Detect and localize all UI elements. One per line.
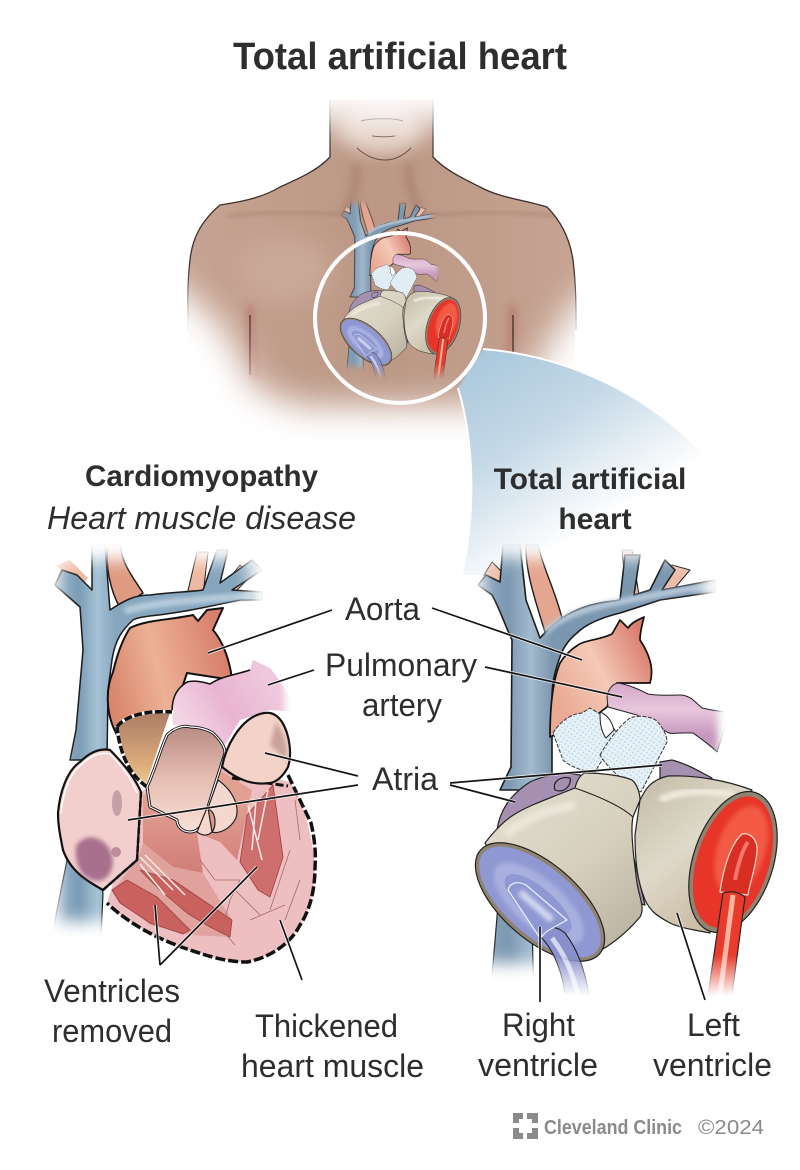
chest shading	[226, 102, 560, 380]
upper ventricle cavity	[143, 770, 252, 873]
vessels	[50, 545, 262, 960]
illustration: small artificial heart in circle	[315, 199, 485, 403]
illustration: torso	[187, 100, 577, 430]
dashed ventricle cut line	[107, 775, 315, 962]
logo mark	[513, 1113, 538, 1139]
illustration: total artificial heart	[455, 545, 794, 1000]
right ventricle tube socket	[508, 883, 567, 938]
label: left ventricle: Left	[687, 1007, 740, 1043]
label: aorta: Aorta	[345, 591, 420, 627]
torso skin	[188, 100, 575, 430]
right ventricle blue cap	[455, 821, 625, 983]
pulmonary artery	[172, 660, 295, 745]
subheading: heart muscle disease: Heart muscle disease	[47, 500, 356, 536]
label: pulmonary artery: artery	[362, 687, 442, 723]
label: atria: Atria	[372, 761, 438, 797]
aortic root cut	[117, 712, 172, 787]
copyright: ©2024	[698, 1117, 764, 1139]
right atrium	[58, 750, 141, 890]
white gap between grafts	[600, 712, 614, 738]
title: Total artificial heart	[233, 36, 567, 78]
blue tube	[540, 927, 590, 1000]
chin and mouth	[357, 119, 411, 160]
fabric graft: pulmonary	[600, 716, 667, 792]
muscle texture	[200, 800, 300, 945]
heading: total artificial heart: heart	[558, 503, 632, 536]
right ventricle housing	[485, 773, 642, 957]
logo wordmark: Cleveland Clinic	[544, 1117, 682, 1139]
label: pulmonary artery: Pulmonary	[325, 647, 477, 683]
heading: cardiomyopathy: Cardiomyopathy	[85, 460, 318, 493]
torso outline	[188, 100, 576, 375]
lower ventricle cavity	[112, 843, 232, 937]
heading: total artificial heart: Total artificial	[494, 463, 686, 496]
leader lines	[128, 608, 705, 1002]
fabric graft: aorta	[553, 708, 617, 772]
atria	[497, 774, 645, 905]
left atrium	[222, 713, 290, 784]
aorta	[550, 617, 652, 737]
aorta	[108, 608, 232, 735]
left ventricle housing	[635, 776, 752, 933]
label: ventricles removed: removed	[52, 1013, 172, 1049]
red tube	[708, 892, 745, 995]
label: right ventricle: ventricle	[478, 1047, 598, 1083]
cut ventricle muscle	[107, 765, 315, 962]
ventricle muscle bundles	[112, 870, 232, 937]
label: left ventricle: ventricle	[653, 1047, 772, 1083]
zoom cone from torso circle to artificial heart	[458, 349, 712, 575]
pulmonary artery	[607, 683, 730, 752]
left ventricle tube socket	[720, 834, 757, 895]
label: right ventricle: Right	[502, 1007, 575, 1043]
label: thickened heart muscle: Thickened	[255, 1008, 398, 1044]
label: thickened heart muscle: heart muscle	[241, 1048, 424, 1084]
great vessels	[478, 545, 715, 1000]
pulmonary root cut	[147, 726, 225, 832]
valve flaps	[197, 780, 237, 835]
left ventricle red cap	[672, 780, 794, 944]
line halos	[128, 608, 705, 1002]
cone edge	[458, 349, 712, 575]
lens circle	[315, 233, 485, 403]
illustration: diseased heart	[50, 545, 315, 962]
label: ventricles removed: Ventricles	[44, 973, 180, 1009]
lines	[128, 608, 705, 1002]
logo: Cleveland Clinic	[513, 1113, 682, 1139]
